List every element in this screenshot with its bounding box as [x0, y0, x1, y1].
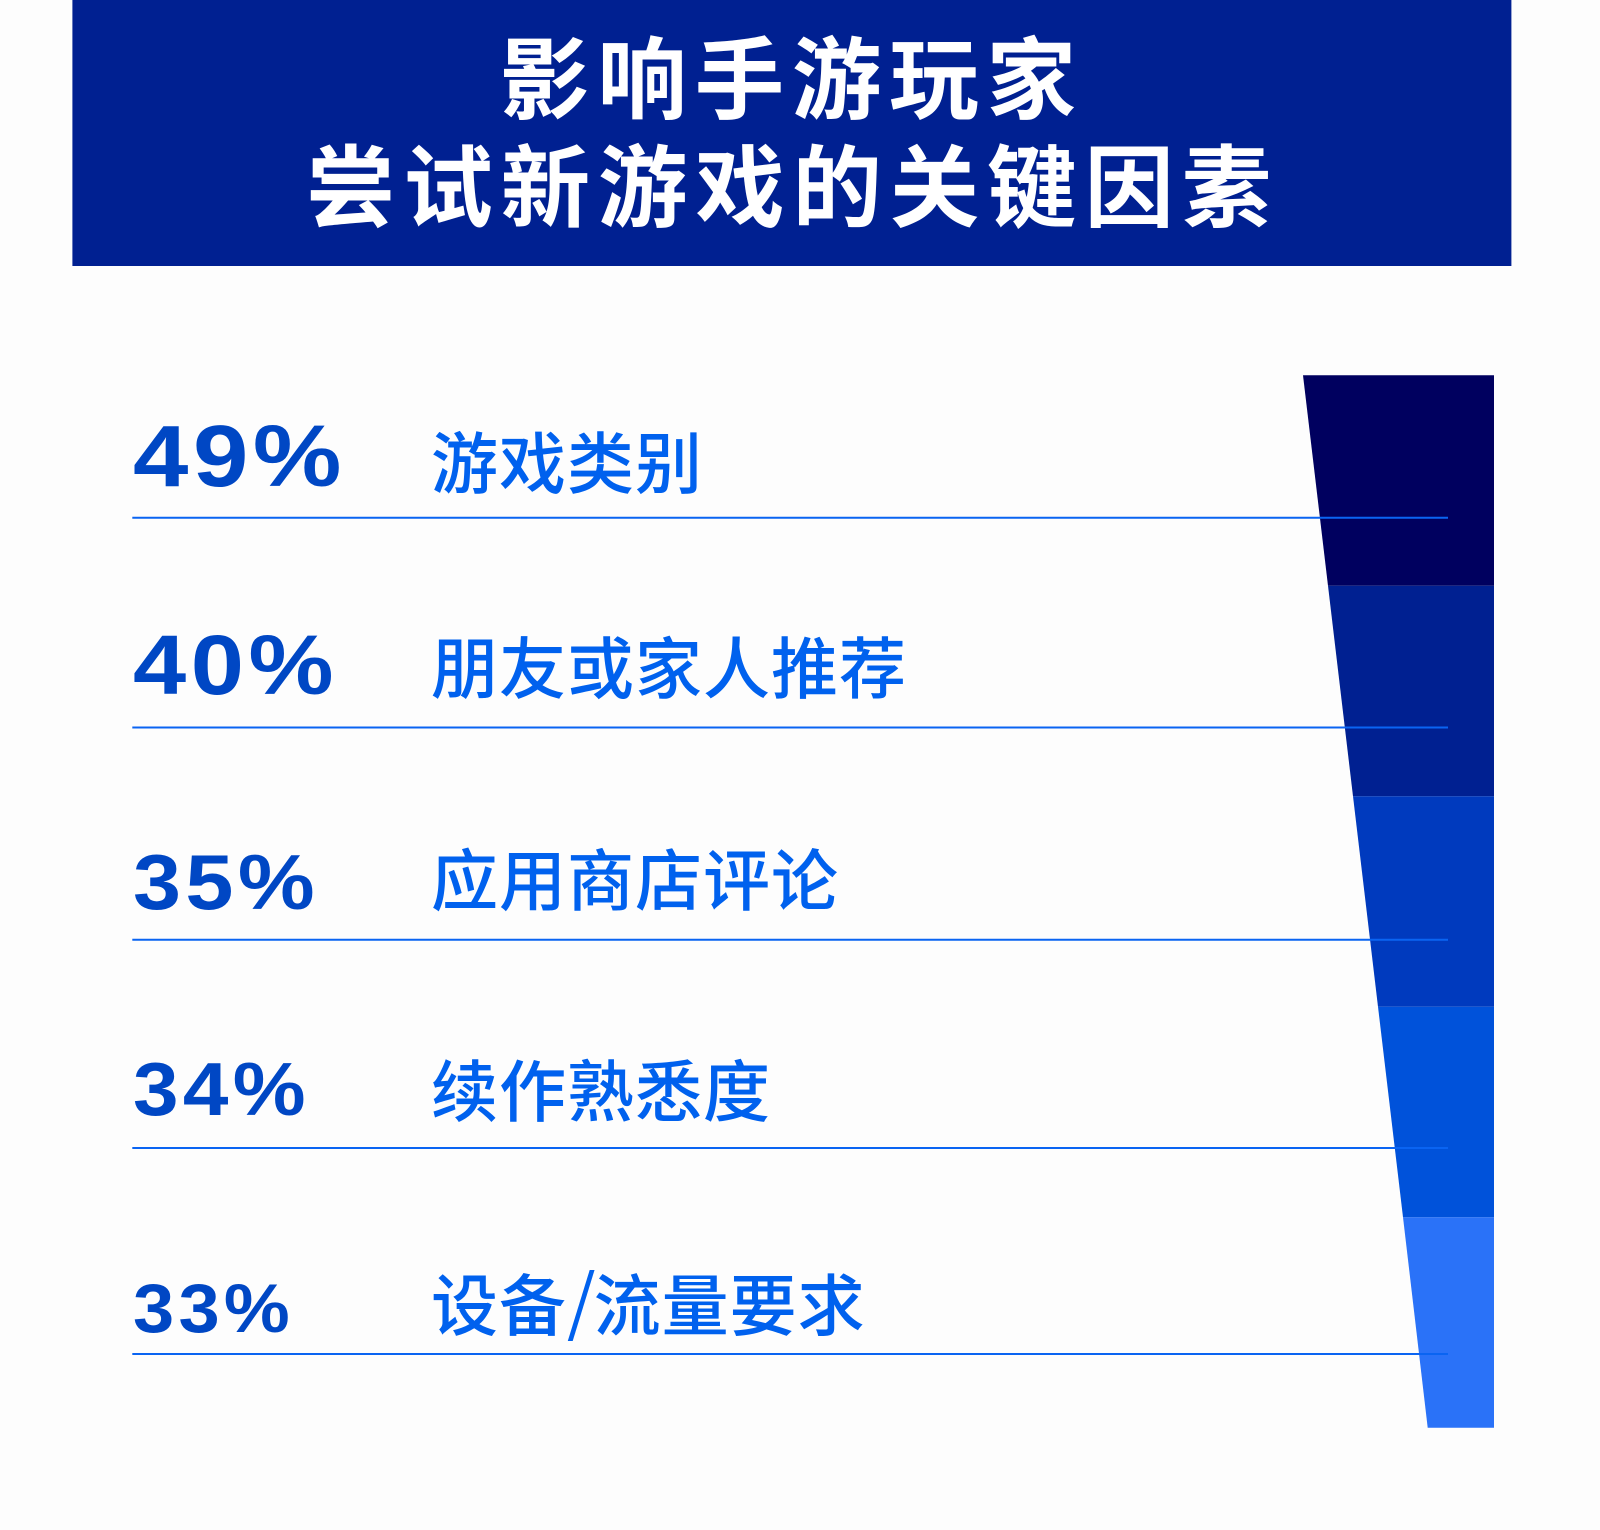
row: 朋友或家人推荐 40%: 40% — [133, 618, 338, 712]
title text — [306, 31, 1279, 239]
row: 应用商店评论 35%: 35% — [133, 838, 319, 926]
row: 设备/流量要求 33%: 设备 — [431, 1270, 567, 1345]
title banner — [72, 0, 1511, 266]
row: 游戏类别 49% — [132, 408, 1448, 518]
title text: 影响手游玩家 — [500, 31, 1084, 131]
row: 应用商店评论 35% — [132, 838, 1448, 940]
row: 续作熟悉度 34%: 续作熟悉度 — [431, 1056, 771, 1131]
funnel chart — [1303, 375, 1494, 1428]
row: 设备/流量要求 33%: 流量要求 — [594, 1270, 866, 1345]
row: 续作熟悉度 34% — [132, 1047, 1448, 1148]
row: 设备/流量要求 33%: 33% — [133, 1270, 294, 1347]
row: 应用商店评论 35%: 应用商店评论 — [431, 845, 839, 920]
title text: 尝试新游戏的关键因素 — [306, 139, 1279, 239]
row: 设备/流量要求 33%: / — [567, 1244, 597, 1350]
row: 朋友或家人推荐 40% — [132, 618, 1448, 728]
row: 朋友或家人推荐 40%: 朋友或家人推荐 — [431, 633, 907, 708]
row: 游戏类别 49%: 游戏类别 — [431, 428, 703, 503]
row: 游戏类别 49%: 49% — [133, 408, 346, 505]
row: 设备/流量要求 33% — [132, 1244, 1448, 1354]
row: 续作熟悉度 34%: 34% — [133, 1047, 310, 1131]
